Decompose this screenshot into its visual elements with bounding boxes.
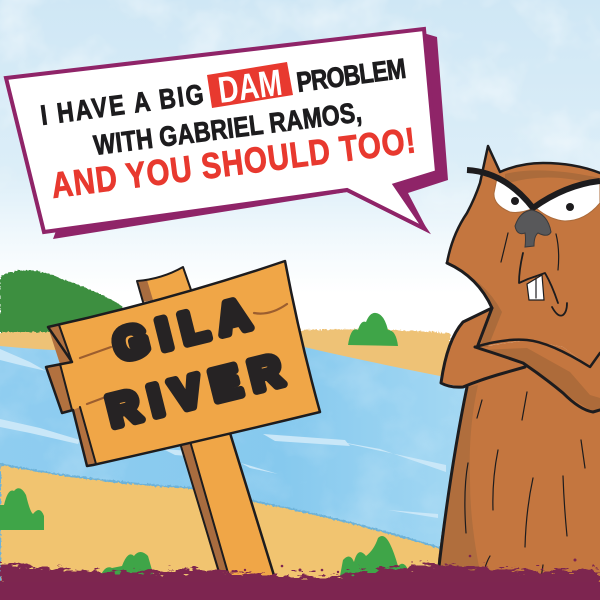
far sand bank — [0, 329, 450, 385]
eyes — [494, 178, 534, 212]
fur marks — [465, 392, 585, 592]
text: AND YOU SHOULD TOO!: AND YOU SHOULD TOO! — [49, 120, 418, 206]
signpost: top of post — [137, 267, 193, 302]
wood cracks — [80, 304, 287, 404]
bubble shadow — [53, 32, 448, 239]
mouth and whisker lines — [519, 253, 567, 316]
nose — [515, 210, 551, 247]
signpost: lower post — [180, 433, 276, 582]
highlight: DAM: DAM — [216, 62, 284, 111]
beaver head — [447, 146, 600, 367]
near sand shore — [0, 464, 440, 600]
text: PROBLEM: PROBLEM — [295, 54, 408, 99]
teeth — [527, 275, 544, 300]
ground speckles — [186, 555, 576, 574]
sign text: GILA: GILA — [109, 290, 254, 371]
arm shading — [478, 348, 600, 412]
board outline — [46, 261, 320, 466]
plank end grain — [46, 325, 96, 466]
river texture — [0, 346, 434, 532]
head shading — [505, 170, 600, 186]
bubble body — [6, 29, 437, 232]
sky clouds texture — [0, 0, 583, 154]
bush: top right — [348, 313, 398, 346]
sky background — [0, 0, 600, 345]
bush: right — [340, 536, 408, 582]
beaver body — [438, 363, 600, 590]
sign board — [46, 261, 320, 466]
speech bubble — [6, 29, 448, 239]
hill — [0, 270, 135, 336]
beaver outlines — [447, 146, 600, 263]
water highlights — [0, 349, 446, 518]
pupils — [511, 197, 519, 205]
beaver — [438, 146, 600, 592]
text: I HAVE A BIG: I HAVE A BIG — [39, 79, 205, 132]
bush: centre — [98, 552, 170, 590]
beaver arms — [441, 308, 600, 412]
river — [0, 346, 470, 570]
eyebrows — [467, 170, 600, 208]
purple ground — [0, 562, 600, 600]
sign text: RIVER: RIVER — [103, 346, 287, 437]
text: WITH GABRIEL RAMOS,: WITH GABRIEL RAMOS, — [92, 97, 363, 162]
bush: left — [0, 488, 44, 530]
